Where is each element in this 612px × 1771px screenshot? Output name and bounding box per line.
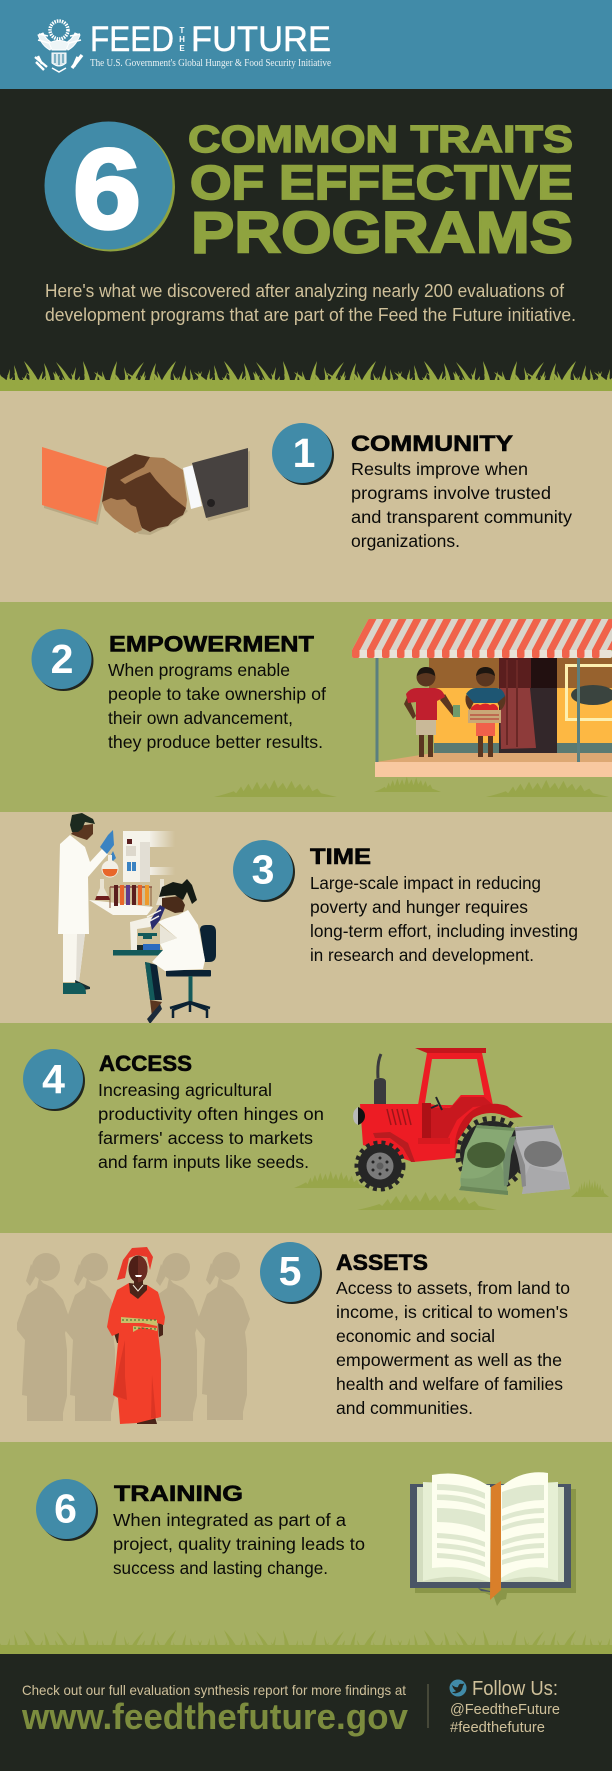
green seed sack (459, 1125, 516, 1195)
badge 3 (233, 840, 295, 902)
title: OF EFFECTIVE (190, 156, 573, 210)
text: community: organizations. (351, 531, 460, 551)
text: empowerment: When programs enable (108, 660, 290, 680)
heading: assets: ASSETS (336, 1250, 428, 1275)
text: community: programs involve trusted (351, 483, 551, 503)
text: time: Large-scale impact in reducing (310, 873, 541, 893)
illustration: lab scientists (58, 813, 216, 1024)
header banner (0, 0, 612, 89)
heading: empowerment: EMPOWERMENT (109, 632, 315, 656)
logo wordmark THE: T (180, 26, 185, 35)
panel: training (0, 1442, 612, 1662)
panel: time (0, 812, 612, 1024)
panel: empowerment (0, 602, 612, 812)
text: access: and farm inputs like seeds. (98, 1152, 309, 1172)
hashtag: #feedthefuture (450, 1719, 545, 1736)
text: assets: economic and social (336, 1326, 495, 1346)
illustration: woman in red dress (107, 1247, 165, 1424)
icon: handshake (42, 447, 250, 535)
badge 6 (36, 1479, 98, 1541)
text: training: When integrated as part of a (113, 1510, 346, 1530)
male scientist (58, 813, 118, 994)
illustration: women silhouettes (17, 1252, 250, 1421)
text: time (310, 873, 578, 965)
logo wordmark FUTURE: FUTURE (191, 20, 331, 59)
grey seed sack (512, 1125, 570, 1194)
badge 4: 4 (42, 1056, 65, 1102)
panel: access (0, 1023, 612, 1233)
text: empowerment: they produce better results. (108, 732, 323, 752)
footer call to action: Check out our full evaluation synthesis report for more findings at (22, 1682, 406, 1698)
title (188, 119, 573, 266)
big number 6 badge: 6 (73, 126, 141, 252)
text: training: success and lasting change. (113, 1558, 328, 1578)
text: access: productivity often hinges on (98, 1104, 324, 1124)
text: community (351, 459, 572, 551)
text: assets: empowerment as well as the (336, 1350, 562, 1370)
badge 5: 5 (279, 1248, 301, 1294)
logo wordmark FEED: FEED (90, 20, 174, 59)
text: access (98, 1080, 324, 1172)
heading: community: COMMUNITY (351, 431, 513, 456)
footer panel (0, 1654, 612, 1771)
badge 2 (32, 629, 94, 691)
badge 1: 1 (293, 430, 315, 476)
rear wheel (458, 1118, 526, 1188)
female scientist (143, 879, 216, 1024)
logo tagline: The U.S. Government's Global Hunger & Food Security Initiative (90, 58, 331, 69)
grass strip bottom (0, 1630, 612, 1662)
icon: US government seal (35, 21, 82, 72)
text: time: in research and development. (310, 945, 534, 965)
illustration: tractor (353, 1048, 570, 1195)
text: assets: and communities. (336, 1398, 473, 1418)
title: PROGRAMS (191, 200, 573, 266)
text: assets: Access to assets, from land to (336, 1278, 570, 1298)
text: access: Increasing agricultural (98, 1080, 272, 1100)
text: empowerment: people to take ownership of (108, 684, 326, 704)
logo wordmark THE (179, 26, 185, 53)
intro panel (0, 89, 612, 393)
icon: twitter bird (450, 1680, 466, 1696)
text: community: and transparent community (351, 507, 572, 527)
website url: www.feedthefuture.gov (21, 1696, 408, 1737)
badge 3: 3 (252, 846, 274, 892)
text: community: Results improve when (351, 459, 528, 479)
heading: access: ACCESS (99, 1051, 192, 1076)
text: time: long-term effort, including investing (310, 921, 578, 941)
awning (352, 619, 612, 658)
front wheel (356, 1142, 404, 1190)
twitter handle: @FeedtheFuture (450, 1701, 560, 1718)
grass tufts (294, 1171, 609, 1210)
text: empowerment: their own advancement, (108, 708, 293, 728)
intro text: Here's what we discovered after analyzing nearly 200 evaluations of (45, 281, 565, 301)
panel: assets (0, 1233, 612, 1442)
text: access: farmers' access to markets (98, 1128, 313, 1148)
logo wordmark THE: H (179, 35, 185, 44)
heading: time: TIME (310, 844, 371, 869)
icon: open book (410, 1472, 576, 1606)
illustration: market stall (352, 619, 612, 777)
badge 6: 6 (54, 1486, 77, 1532)
badge 2: 2 (51, 636, 73, 682)
divider (428, 1684, 429, 1728)
big number 6 badge (44, 122, 175, 252)
text: assets (336, 1278, 570, 1418)
grass tufts (214, 777, 609, 797)
badge 4 (23, 1049, 85, 1111)
text: time: poverty and hunger requires (310, 897, 528, 917)
person with money (404, 667, 460, 757)
person with crate (466, 667, 506, 757)
badge 5 (260, 1242, 322, 1304)
panel: community (0, 391, 612, 602)
text: training: project, quality training leads to (113, 1534, 365, 1554)
heading: training: TRAINING (114, 1481, 243, 1506)
text: training (113, 1510, 365, 1578)
lab machine (89, 831, 175, 956)
text: empowerment (108, 660, 326, 752)
text: assets: income, is critical to women's (336, 1302, 568, 1322)
logo wordmark THE: E (179, 44, 185, 53)
intro text: development programs that are part of the Feed the Future initiative. (45, 305, 576, 325)
title: COMMON TRAITS (188, 119, 573, 161)
intro text (45, 281, 576, 325)
follow us label: Follow Us: (472, 1678, 558, 1700)
grass strip top (0, 361, 612, 393)
badge 1 (272, 423, 334, 485)
text: assets: health and welfare of families (336, 1374, 563, 1394)
